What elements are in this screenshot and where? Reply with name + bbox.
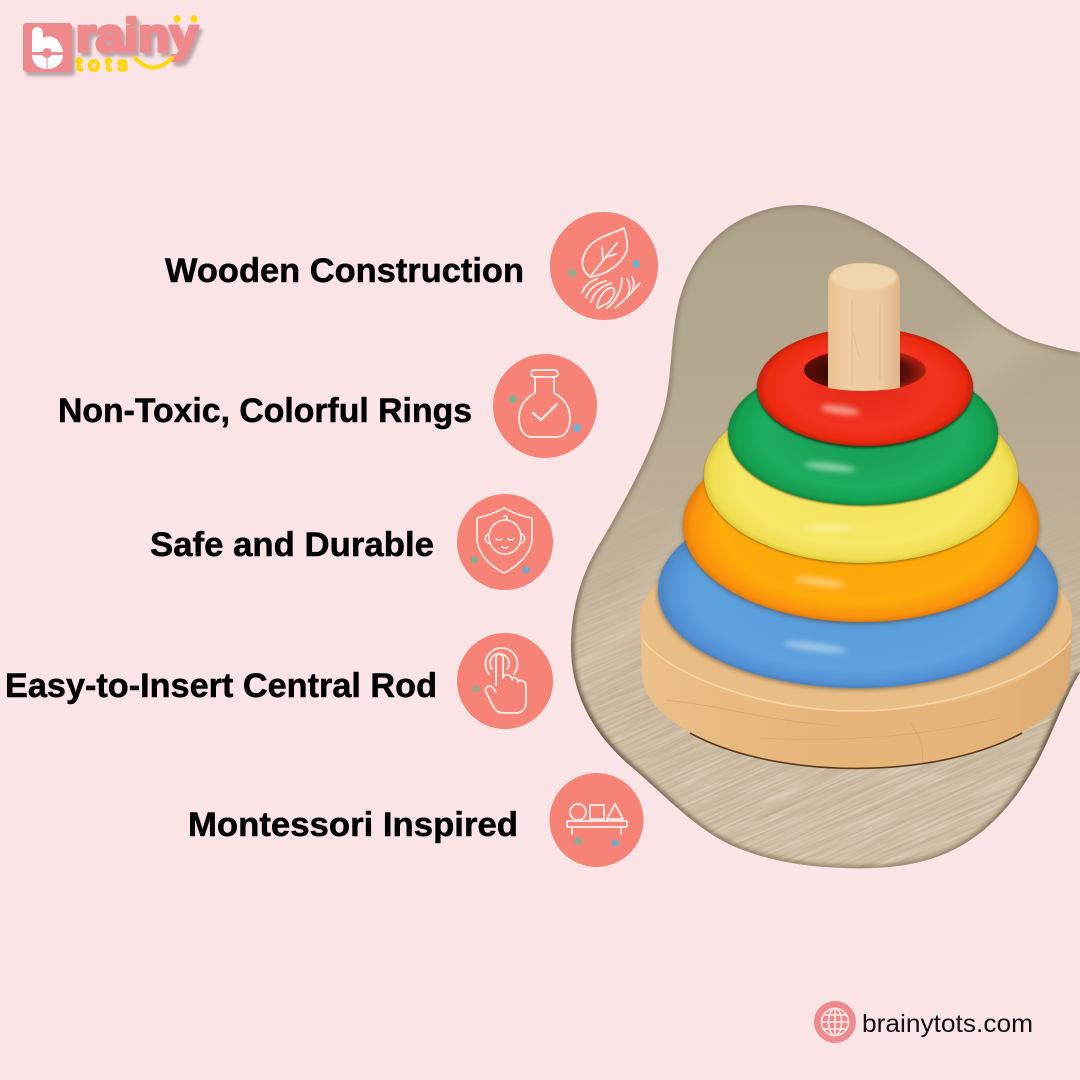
product photo blob (560, 200, 1080, 880)
logo wordmark: rainy: rainy (76, 9, 198, 61)
icon: leaf and wood grain (550, 212, 658, 320)
logo wordmark: tots: tots (76, 54, 128, 76)
icon: baby face shield (457, 494, 553, 590)
icon: flask with check (493, 354, 597, 458)
website footer (814, 1001, 1033, 1043)
website address: brainytots.com (862, 1010, 1033, 1038)
icon: shapes on a shelf (550, 773, 644, 867)
icon: hand tapping (457, 633, 553, 729)
wooden floor (560, 200, 1080, 880)
stacking toy (640, 263, 1073, 768)
logo: Brainy Tots (23, 9, 198, 76)
label: Safe and Durable (150, 526, 434, 564)
icon: globe (814, 1001, 856, 1043)
orange ring (680, 478, 1042, 627)
green ring (726, 388, 1000, 508)
label: Easy-to-Insert Central Rod (5, 667, 437, 705)
feature 1: Wooden Construction (165, 212, 658, 320)
feature 4: Easy-to-Insert Central Rod (5, 633, 553, 729)
wooden peg (828, 263, 900, 391)
label: Wooden Construction (165, 252, 524, 290)
label: Non-Toxic, Colorful Rings (58, 392, 472, 430)
feature 2: Non-Toxic, Colorful Rings (58, 354, 597, 458)
red ring (757, 328, 973, 448)
blue ring (654, 540, 1062, 692)
feature 5: Montessori Inspired (188, 773, 644, 867)
feature 3: Safe and Durable (150, 494, 553, 590)
label: Montessori Inspired (188, 806, 518, 844)
logo mark (23, 23, 72, 72)
logo smile (135, 15, 198, 67)
yellow ring (702, 429, 1020, 566)
wooden base (640, 583, 1073, 770)
